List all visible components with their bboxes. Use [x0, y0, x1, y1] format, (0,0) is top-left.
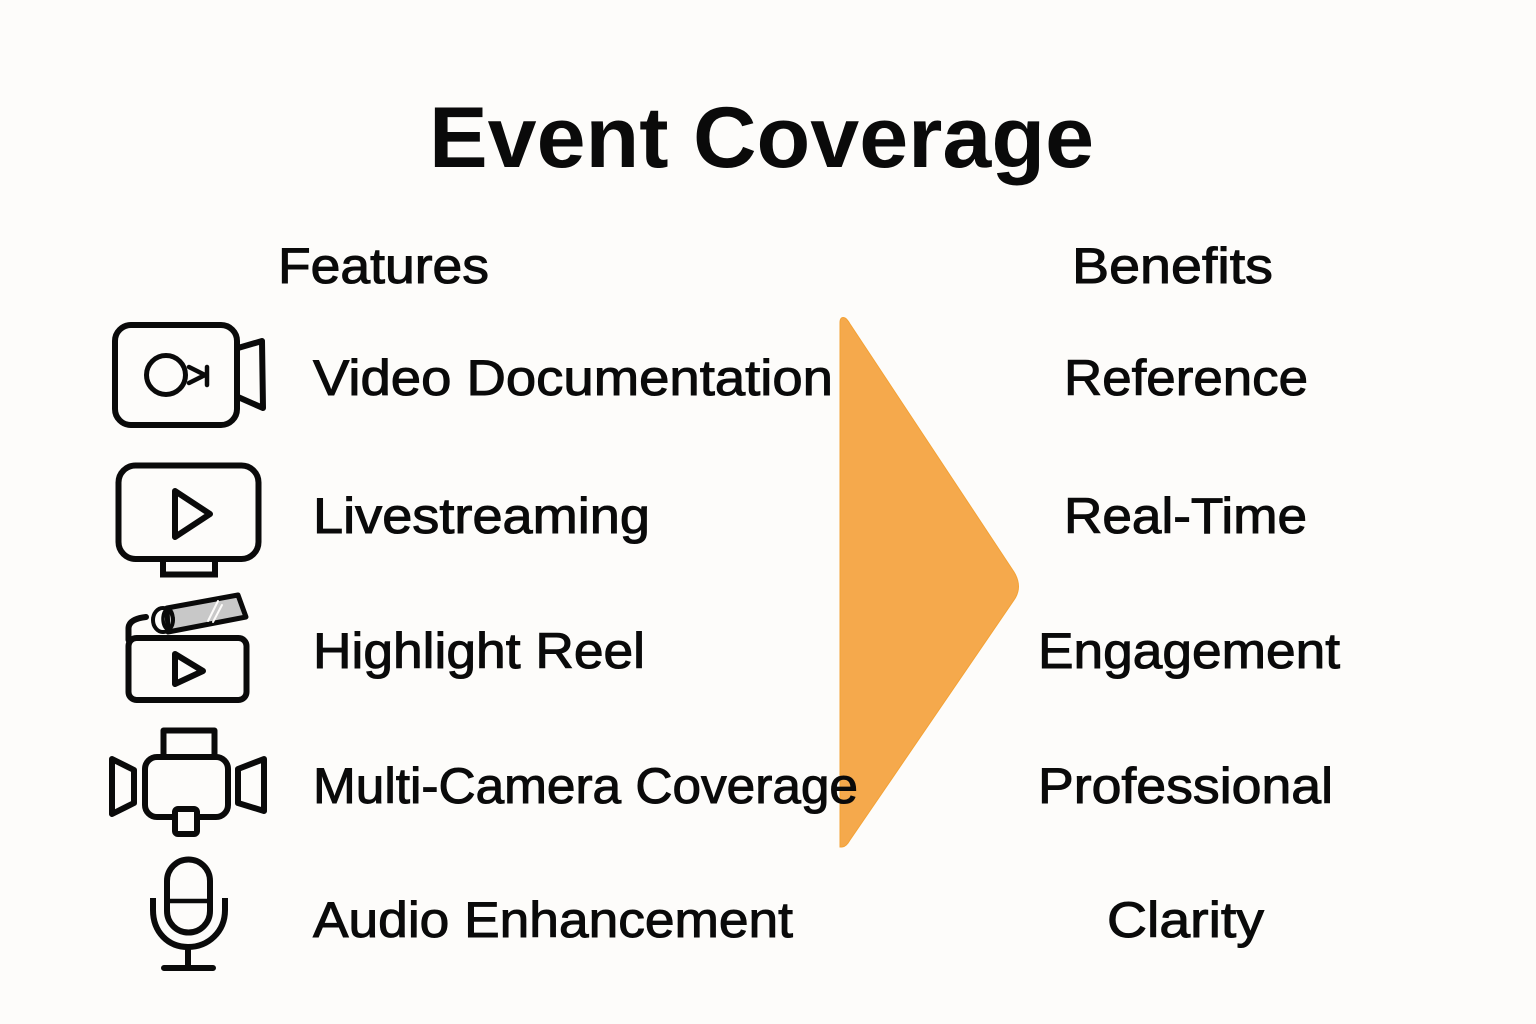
icon: multi-camera setup: [112, 730, 264, 834]
feature: video documentation: Video Documentation: [313, 350, 833, 406]
heading: features: Features: [278, 238, 489, 294]
benefit: engagement: Engagement: [1038, 623, 1340, 679]
icon: monitor with play button: [118, 466, 258, 574]
icon: video camera: [115, 325, 263, 425]
benefit: professional: Professional: [1038, 758, 1333, 814]
heading: benefits: Benefits: [1072, 238, 1273, 294]
title: Event Coverage: [429, 90, 1094, 186]
benefit: reference: Reference: [1064, 350, 1308, 406]
feature: multi-camera coverage: Multi-Camera Coverage: [313, 758, 858, 814]
icon: microphone: [153, 860, 225, 968]
arrow: orange triangle: [840, 318, 1018, 847]
benefit: real-time: Real-Time: [1064, 488, 1307, 544]
feature: livestreaming: Livestreaming: [313, 488, 650, 544]
feature: audio enhancement: Audio Enhancement: [313, 892, 793, 948]
icon: clapperboard with play button: [128, 595, 246, 700]
benefit: clarity: Clarity: [1107, 892, 1264, 948]
feature: highlight reel: Highlight Reel: [313, 623, 645, 679]
